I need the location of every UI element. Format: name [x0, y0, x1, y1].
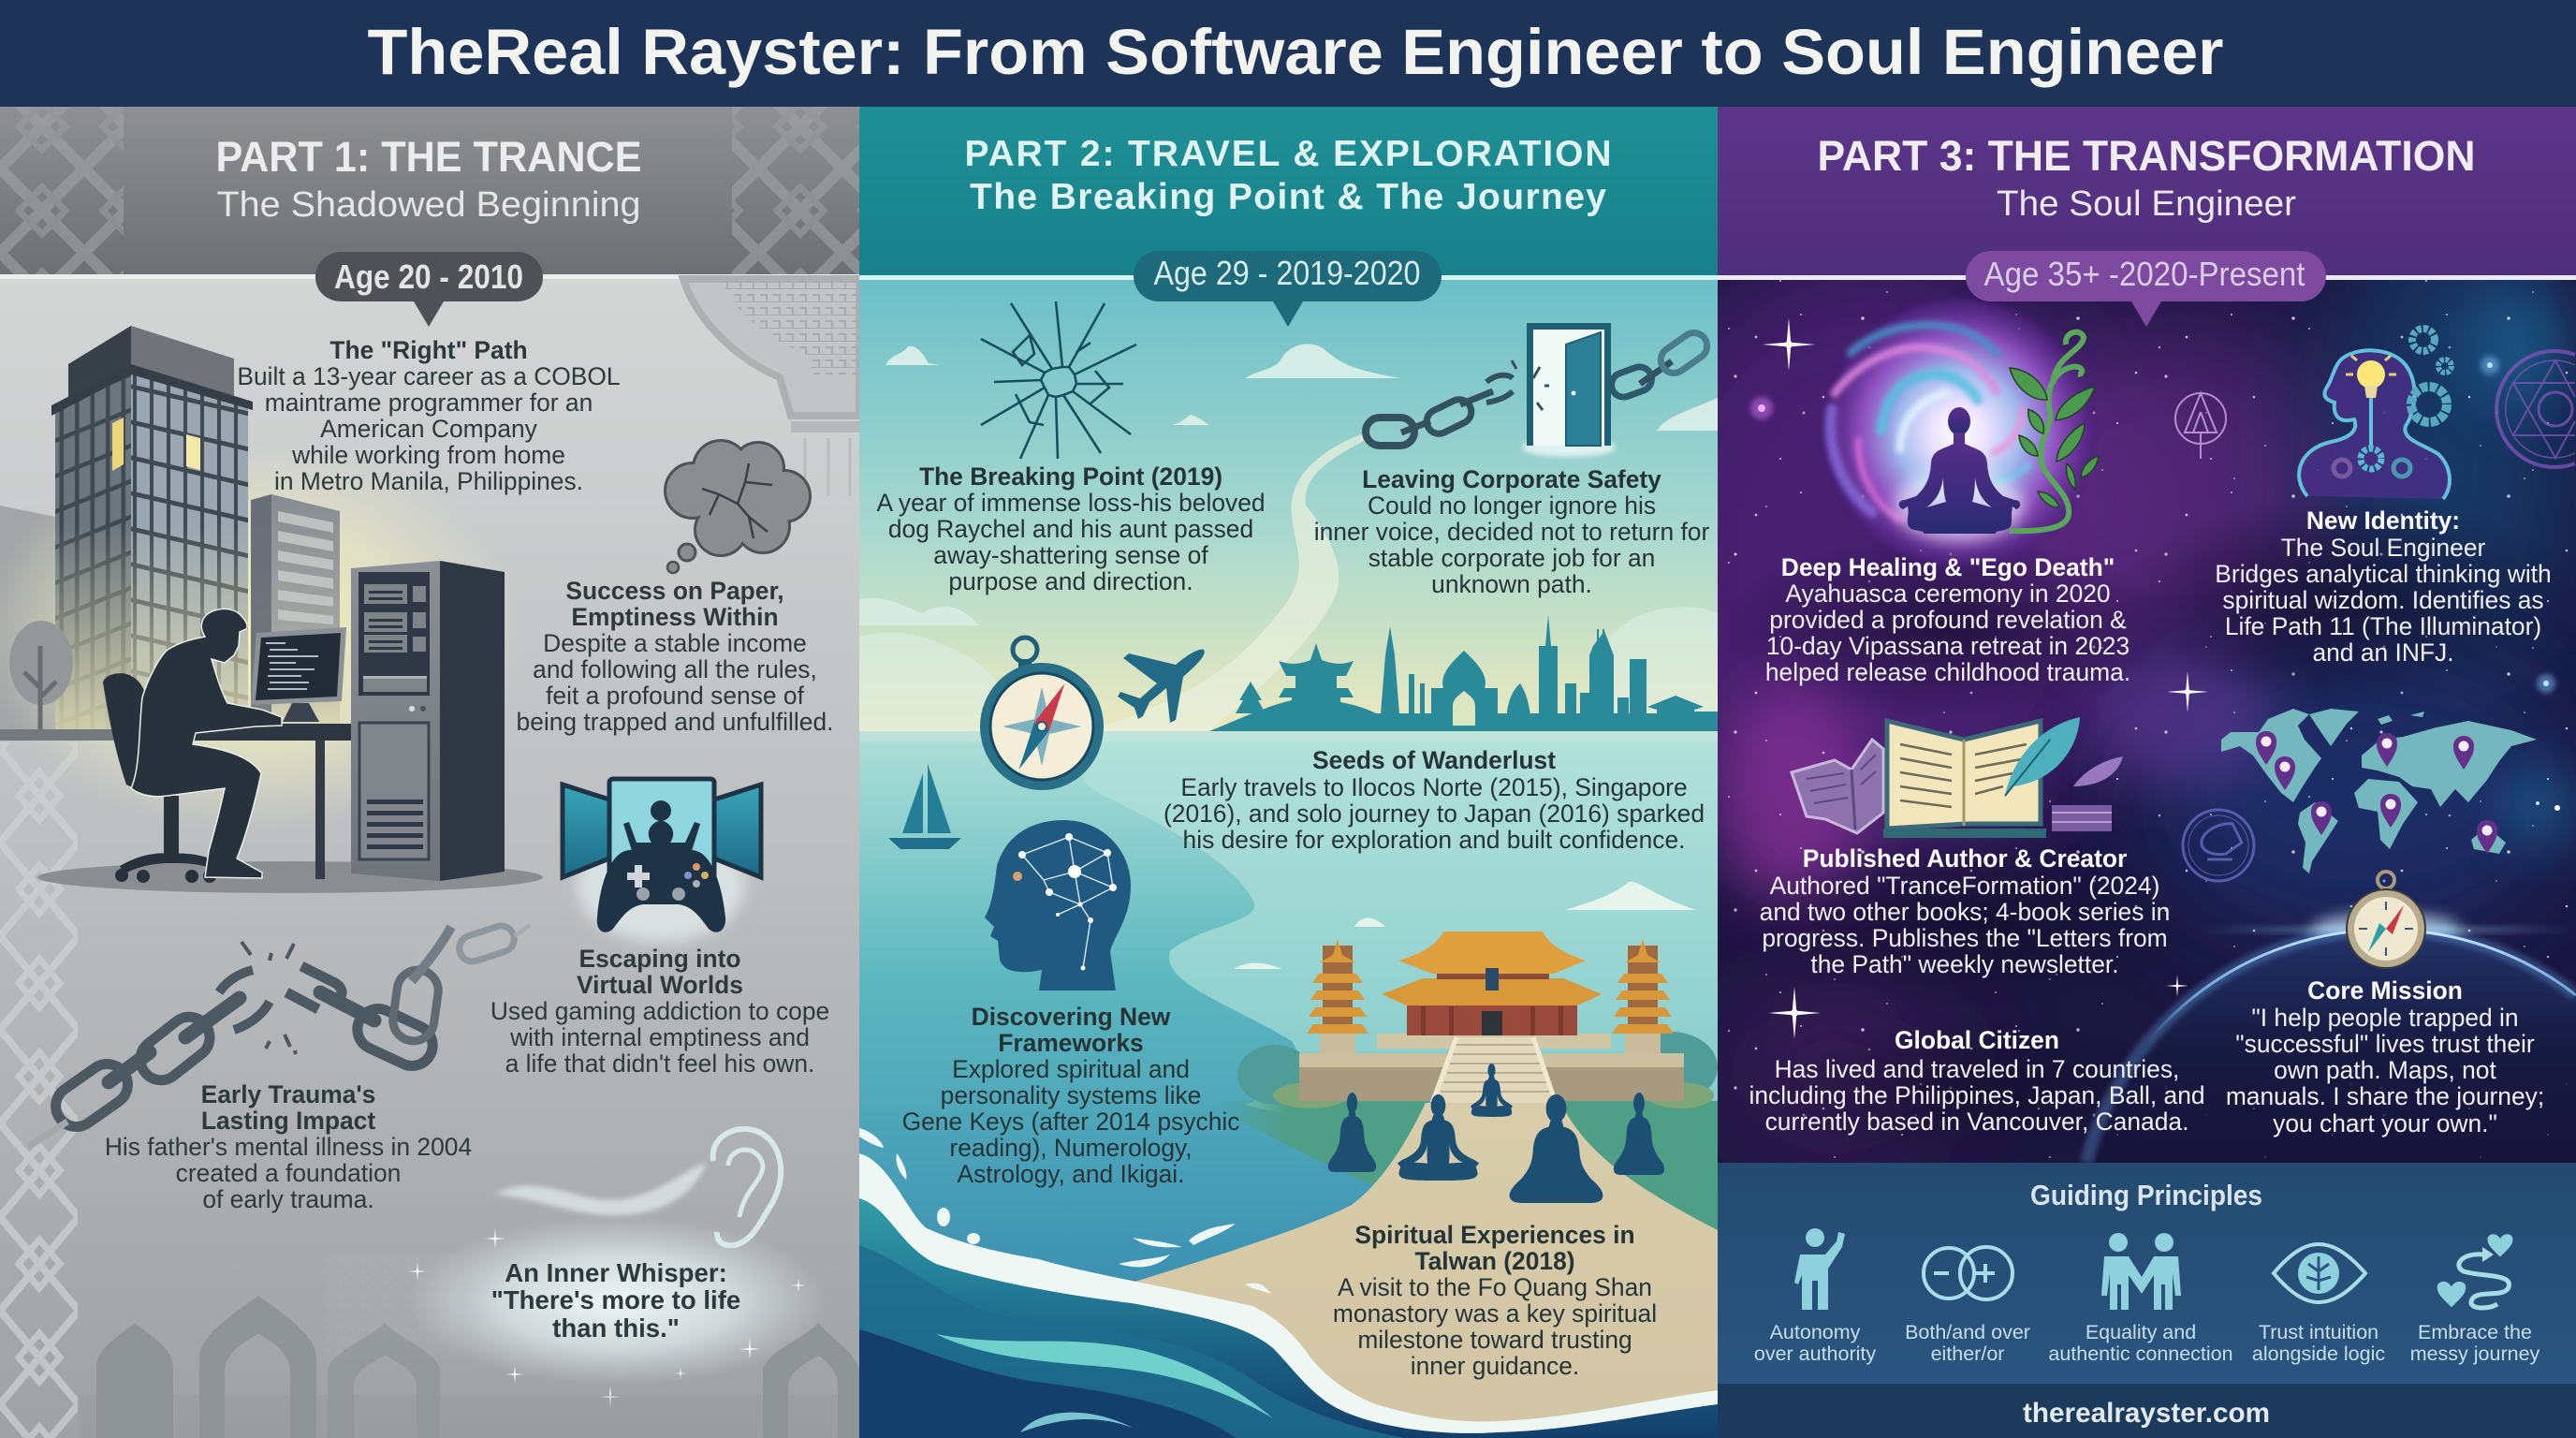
- principle: trust intuition: alongside logic: [2252, 1343, 2385, 1365]
- part 2 heading: [964, 134, 1612, 217]
- icon: airplane: [1118, 650, 1205, 723]
- text: success on paper: Success on Paper,: [565, 577, 784, 605]
- text: core mission: own path. Maps, not: [2274, 1056, 2496, 1084]
- text: success on paper: being trapped and unfulfilled.: [517, 708, 833, 736]
- icon: shattered glass: [981, 301, 1136, 459]
- principle: messy journey: [2410, 1234, 2540, 1365]
- road path: [1088, 433, 1366, 731]
- text: spiritual experiences: milestone toward trusting: [1357, 1326, 1632, 1354]
- meditators: [1328, 1064, 1664, 1203]
- principle: both and: either/or: [1931, 1343, 2004, 1365]
- text: spiritual experiences: Talwan (2018): [1414, 1247, 1575, 1275]
- text: discovering new frameworks: Gene Keys (after 2014 psychic: [902, 1108, 1239, 1136]
- text: core mission: you chart your own.": [2273, 1109, 2497, 1137]
- text: success on paper: feit a profound sense of: [546, 682, 805, 710]
- text: spiritual experiences: A visit to the Fo Quang Shan: [1338, 1273, 1652, 1301]
- text: early trauma: created a foundation: [176, 1159, 401, 1187]
- text: seeds of wanderlust: Seeds of Wanderlust: [1312, 746, 1556, 774]
- text: seeds of wanderlust: (2016), and solo journey to Japan (2016) sparked: [1164, 800, 1705, 828]
- part 1 heading: [215, 133, 642, 225]
- text: breaking point: The Breaking Point (2019): [919, 462, 1222, 491]
- text: new identity: spiritual wizdom. Identifies as: [2222, 586, 2544, 614]
- illustration: left pagoda: [1307, 939, 1368, 1054]
- dark halos behind text: [1723, 496, 2576, 1161]
- text: leaving corporate safety: inner voice, decided not to return for: [1314, 518, 1709, 546]
- icon: open door: [1522, 323, 1616, 457]
- text: early trauma: Lasting Impact: [201, 1107, 375, 1135]
- part 2 header band: [859, 107, 1718, 275]
- text: discovering new frameworks: Astrology, and Ikigai.: [957, 1160, 1185, 1188]
- icon: constellation head: [985, 820, 1131, 990]
- yellow glow: [0, 473, 460, 811]
- principle: messy journey: Embrace the: [2418, 1321, 2532, 1343]
- text: leaving corporate safety: Leaving Corporate Safety: [1362, 465, 1661, 493]
- illustration: tree: [9, 621, 73, 729]
- part 1 heading: PART 1: THE TRANCE: [215, 133, 642, 181]
- text: seeds of wanderlust: his desire for exploration and built confidence.: [1183, 826, 1685, 854]
- text: the right path: Built a 13-year career as a COBOL: [237, 362, 621, 390]
- text: discovering new frameworks: Explored spiritual and: [952, 1055, 1190, 1083]
- text: early trauma: Early Trauma's: [201, 1080, 375, 1108]
- part 2 subheading: The Breaking Point & The Journey: [970, 177, 1606, 217]
- title banner: [0, 0, 2576, 107]
- footer bar: [1718, 1384, 2576, 1438]
- illustration: computer tower: [351, 561, 505, 881]
- text: the right path: maintrame programmer for an: [265, 389, 593, 417]
- text: success on paper: Despite a stable income: [543, 629, 807, 657]
- part 3 heading: PART 3: THE TRANSFORMATION: [1818, 132, 2475, 180]
- text: the right path: while working from home: [291, 441, 565, 469]
- principle: equality: Equality and: [2086, 1321, 2196, 1343]
- panel: part 3 the transformation: [1610, 107, 2576, 1438]
- text: core mission: manuals. I share the journey;: [2226, 1082, 2544, 1110]
- text: escaping into virtual worlds: a life that didn't feel his own.: [505, 1049, 814, 1078]
- principle: trust intuition: Trust intuition: [2259, 1321, 2378, 1343]
- lighter sea band: [1078, 731, 1718, 1217]
- text: seeds of wanderlust: Early travels to Ilocos Norte (2015), Singapore: [1180, 773, 1688, 801]
- footer bar: therealrayster.com: [2023, 1398, 2270, 1429]
- text: new identity: The Soul Engineer: [2281, 534, 2486, 562]
- illustration: ocean waves: [859, 1128, 1718, 1438]
- icon: gaming screens and controller: [563, 779, 761, 943]
- part 2 heading: PART 2: TRAVEL & EXPLORATION: [964, 134, 1612, 174]
- principle: equality: authentic connection: [2048, 1343, 2233, 1365]
- age badge: part 3: Age 35+ -2020-Present: [1984, 255, 2305, 293]
- panel: guiding principles: [1718, 1163, 2576, 1384]
- icon: books and quill: [1792, 717, 2123, 838]
- part 1 subheading: The Shadowed Beginning: [217, 185, 640, 225]
- text: global citizen: Has lived and traveled in 7 countries,: [1775, 1055, 2179, 1083]
- text: escaping into virtual worlds: Escaping into: [578, 945, 741, 973]
- text: global citizen: Global Citizen: [1895, 1026, 2059, 1054]
- illustration: glowing planet: [2086, 913, 2576, 1163]
- text: deep healing: 10-day Vipassana retreat in 2023: [1766, 632, 2130, 660]
- text: breaking point: A year of immense loss-his beloved: [876, 489, 1266, 517]
- glow stars: [1750, 318, 2560, 1039]
- title: TheReal Rayster: From Software Engineer to Soul Engineer: [367, 16, 2224, 88]
- icon: sailboat: [888, 764, 961, 849]
- icon: mission compass: [2346, 872, 2426, 969]
- illustration: office tower: [51, 326, 253, 729]
- text: new identity: New Identity:: [2306, 506, 2460, 535]
- age badge: part 1: [315, 252, 543, 327]
- background ornament: arch corner: [683, 279, 859, 496]
- illustration: monitor: [251, 627, 346, 722]
- text: core mission: Core Mission: [2307, 976, 2463, 1005]
- space background: [1610, 206, 2576, 1163]
- text: spiritual experiences: monastory was a key spiritual: [1333, 1299, 1657, 1328]
- text: published author: the Path" weekly newsletter.: [1810, 950, 2119, 978]
- background: arches: [80, 1296, 859, 1438]
- text: breaking point: dog Raychel and his aunt passed: [888, 515, 1253, 543]
- text: leaving corporate safety: unknown path.: [1431, 570, 1592, 598]
- illustration: chair: [103, 673, 225, 883]
- text: spiritual experiences: inner guidance.: [1411, 1352, 1579, 1380]
- principle: autonomy: [1754, 1228, 1876, 1365]
- icon: ear and wind wisp: [494, 1129, 781, 1245]
- sand path: [1132, 1103, 1718, 1438]
- text: success on paper: Emptiness Within: [571, 603, 779, 631]
- text: breaking point: away-shattering sense of: [933, 541, 1208, 569]
- text: inner whisper: than this.": [552, 1313, 680, 1343]
- icon: compass: [980, 638, 1104, 790]
- text: success on paper: and following all the rules,: [533, 655, 817, 683]
- text: inner whisper: "There's more to life: [491, 1285, 740, 1314]
- text: leaving corporate safety: Could no longer ignore his: [1368, 492, 1656, 520]
- part 1 header band: [0, 107, 859, 275]
- text: the right path: The "Right" Path: [329, 336, 528, 364]
- icon: broken chain: [28, 922, 530, 1147]
- sky background: [859, 279, 1718, 732]
- principle: equality: [2048, 1233, 2233, 1365]
- grass lawn: [1217, 1101, 1718, 1245]
- icon: world map with pins: [2221, 709, 2537, 873]
- text: discovering new frameworks: reading), Numerology,: [949, 1134, 1193, 1162]
- icon: hexagram seal: [2496, 351, 2575, 467]
- panel: part 2 travel and exploration: [859, 107, 1718, 1438]
- illustration: small building: [251, 494, 340, 729]
- text: early trauma: His father's mental illness in 2004: [105, 1133, 472, 1161]
- text: new identity: and an INFJ.: [2312, 638, 2454, 667]
- sea background: [859, 731, 1718, 1438]
- text: the right path: American Company: [320, 415, 538, 443]
- ground band: [0, 729, 114, 741]
- text: inner whisper: An Inner Whisper:: [505, 1258, 727, 1287]
- text: escaping into virtual worlds: Used gaming addiction to cope: [490, 997, 829, 1025]
- principle: trust intuition: [2252, 1244, 2385, 1365]
- text: global citizen: currently based in Vancouver, Canada.: [1765, 1108, 2188, 1136]
- principle: messy journey: messy journey: [2410, 1343, 2540, 1365]
- illustration: thought cloud: [666, 442, 809, 573]
- background: hill: [0, 506, 55, 729]
- principle: both and: [1905, 1247, 2030, 1365]
- text: deep healing: Ayahuasca ceremony in 2020: [1785, 580, 2111, 608]
- illustration: programmer silhouette: [131, 609, 282, 878]
- hills behind temple: [1237, 1032, 1718, 1108]
- age badge: part 2: Age 29 - 2019-2020: [1153, 254, 1421, 292]
- text: escaping into virtual worlds: Virtual Worlds: [577, 971, 743, 999]
- text: published author: Published Author & Creator: [1803, 844, 2127, 873]
- clouds: [859, 344, 1718, 731]
- text: published author: and two other books; 4-book series in: [1760, 898, 2170, 926]
- icon: head with lightbulb and gears: [2299, 329, 2452, 499]
- horizon light: [859, 731, 1718, 741]
- text: breaking point: purpose and direction.: [948, 567, 1193, 595]
- clouds near temple: [1234, 882, 1696, 969]
- text: escaping into virtual worlds: with internal emptiness and: [509, 1023, 810, 1051]
- text: deep healing: helped release childhood trauma.: [1765, 658, 2130, 686]
- background ornament: lattice band: [0, 742, 78, 1438]
- text: the right path: in Metro Manila, Philippines.: [274, 467, 583, 495]
- text: new identity: Life Path 11 (The Illuminator): [2225, 612, 2541, 640]
- heading: guiding principles: Guiding Principles: [2030, 1179, 2262, 1211]
- whisper glow: [328, 1217, 828, 1408]
- age badge: part 2: [1134, 251, 1442, 327]
- icon: triangle emblem: [2175, 393, 2226, 459]
- principle: autonomy: Autonomy: [1770, 1321, 1861, 1343]
- text: discovering new frameworks: Frameworks: [998, 1029, 1144, 1057]
- icon: chain to the door: [1366, 328, 1712, 446]
- text: published author: Authored "TranceFormation" (2024): [1770, 872, 2159, 900]
- principle: autonomy: over authority: [1754, 1343, 1876, 1365]
- illustration: temple: [1299, 932, 1684, 1103]
- text: leaving corporate safety: stable corporate job for an: [1368, 544, 1655, 572]
- text: core mission: "successful" lives trust their: [2235, 1030, 2535, 1058]
- age badge: part 3: [1966, 251, 2326, 327]
- text: global citizen: including the Philippines, Japan, Ball, and: [1749, 1081, 2205, 1109]
- icon: growing vine: [2010, 332, 2099, 531]
- text: published author: progress. Publishes the "Letters from: [1762, 924, 2168, 952]
- text: deep healing: provided a profound revelation &: [1769, 606, 2127, 634]
- icon: small seal: [2183, 810, 2254, 881]
- text: deep healing: Deep Healing & "Ego Death": [1781, 553, 2115, 581]
- icon: meditator in spiral: [1819, 292, 2100, 573]
- text: discovering new frameworks: Discovering New: [972, 1003, 1171, 1031]
- panel: part 1 the trance: [0, 107, 859, 1438]
- text: spiritual experiences: Spiritual Experiences in: [1354, 1221, 1635, 1249]
- part 3 header band: [1718, 107, 2576, 275]
- age badge: part 1: Age 20 - 2010: [334, 257, 523, 296]
- text: core mission: "I help people trapped in: [2251, 1004, 2519, 1032]
- text: discovering new frameworks: personality systems like: [941, 1081, 1201, 1109]
- text: early trauma: of early trauma.: [202, 1185, 374, 1213]
- text: new identity: Bridges analytical thinking with: [2215, 560, 2552, 588]
- part 3 subheading: The Soul Engineer: [1997, 184, 2296, 224]
- illustration: floor shadow: [37, 861, 543, 893]
- principle: both and: Both/and over: [1905, 1321, 2030, 1343]
- icon: city skyline: [1209, 614, 1718, 731]
- illustration: desk: [192, 724, 351, 879]
- illustration: right pagoda: [1612, 939, 1674, 1054]
- part 3 heading: [1818, 132, 2475, 224]
